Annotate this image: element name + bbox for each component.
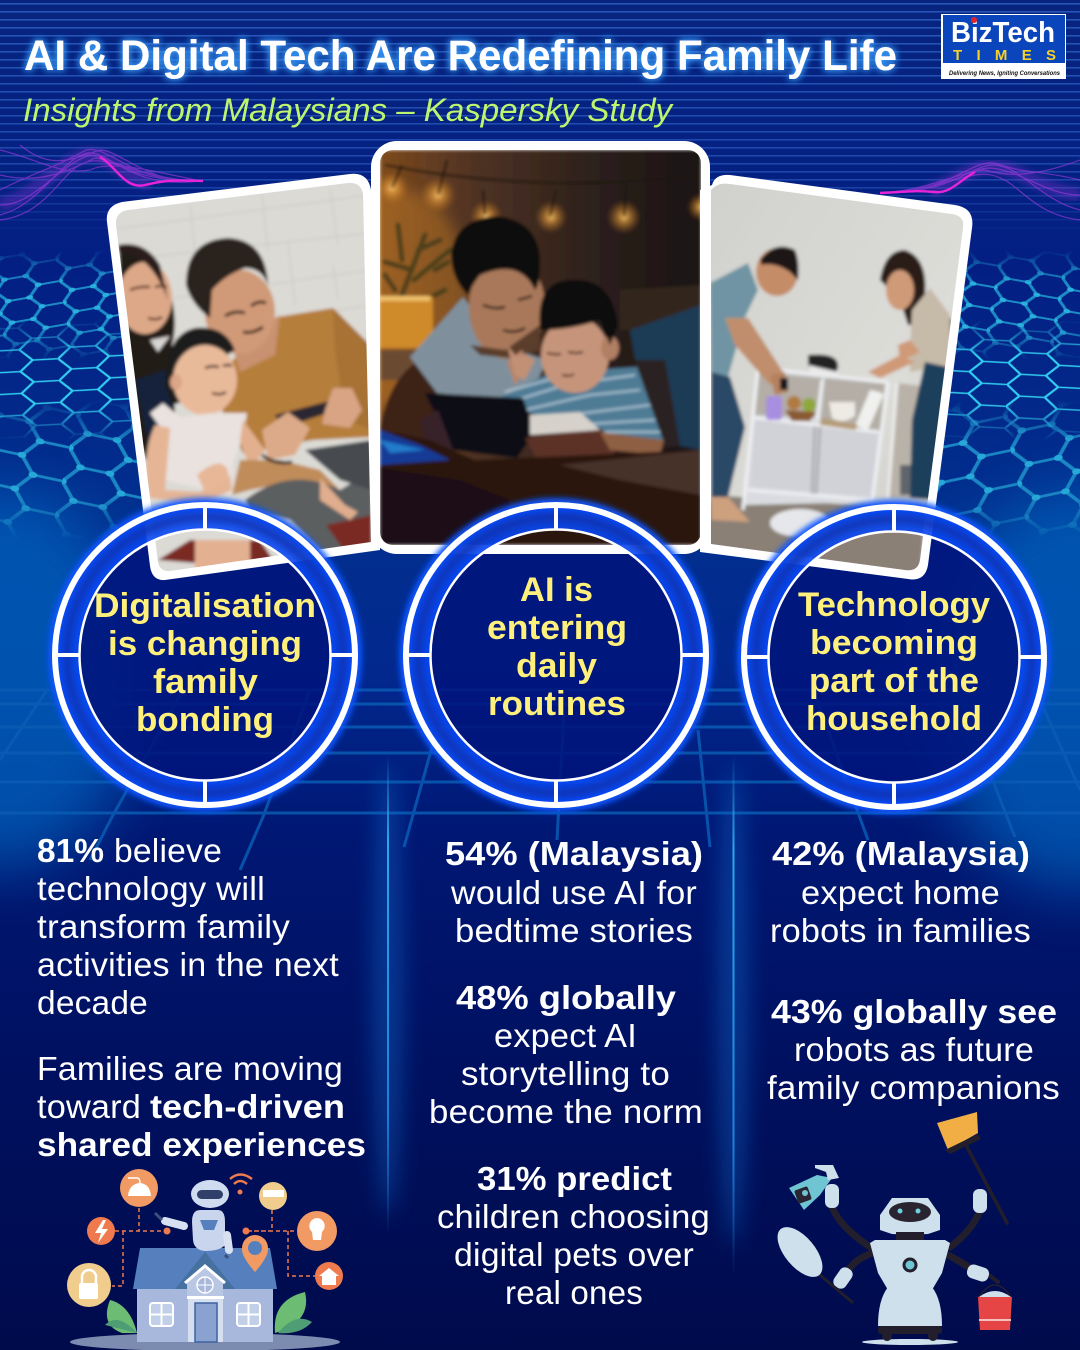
decorative wave left [0, 145, 203, 220]
heading: digitalisation: Digitalisation [94, 587, 316, 625]
text block: AI storytelling stat: expect AI [494, 1017, 637, 1054]
text block: column 1 stat: technology will [37, 870, 265, 907]
text block: digital pets stat: 31% predict [477, 1160, 672, 1197]
circle badge: household technology [744, 507, 1044, 807]
text block: robot companions stat: robots as future [794, 1031, 1034, 1068]
heading: digitalisation: family [153, 663, 258, 701]
text block: digital pets stat: children choosing [437, 1198, 710, 1235]
icon: smart home with robot [67, 1169, 343, 1350]
logo: BizTech Times [941, 14, 1066, 79]
text block: robot companions stat: 43% globally see [771, 993, 1057, 1030]
text block: digital pets stat: digital pets over [454, 1236, 694, 1273]
heading: digitalisation [94, 587, 316, 739]
icon: cleaning robot with tools [769, 1112, 1012, 1345]
photo: couple with home robot and cabinet [700, 170, 980, 590]
text block: bedtime stories stat: bedtime stories [455, 912, 693, 949]
text block: digital pets stat: real ones [505, 1274, 643, 1311]
text block: digital pets stat [437, 1160, 710, 1311]
text block: home robots stat: 42% (Malaysia) [772, 835, 1030, 872]
heading: AI routines: daily [516, 647, 597, 685]
logo: BizTech Times: Delivering News, Igniting Conversations [949, 70, 1061, 77]
text block: bedtime stories stat: 54% (Malaysia) [445, 835, 703, 872]
circle badge: digitalisation [55, 505, 355, 805]
text block: AI storytelling stat: 48% globally [456, 979, 677, 1016]
logo: BizTech Times: TIMES [953, 47, 1056, 64]
navy discs behind photos [78, 528, 1021, 784]
text block: robot companions stat [767, 993, 1060, 1106]
heading: digitalisation: bonding [136, 701, 274, 739]
subtitle: Insights from Malaysians – Kaspersky Study [23, 92, 674, 128]
text block: column 1 shared experiences: shared experiences [37, 1126, 366, 1163]
heading: AI routines [487, 571, 627, 723]
heading: household technology [798, 586, 990, 738]
circle badge: AI routines [406, 505, 706, 805]
text block: column 1 shared experiences [37, 1050, 366, 1163]
text block: bedtime stories stat [445, 835, 703, 949]
text block: column 1 stat: 81% [37, 832, 104, 869]
text block: home robots stat: robots in families [770, 912, 1031, 949]
text block: home robots stat: expect home [801, 874, 1000, 911]
logo: BizTech Times: BizTech [951, 17, 1055, 49]
heading: household technology: household [806, 700, 982, 738]
text block: column 1 stat: decade [37, 984, 148, 1021]
heading: household technology: becoming [810, 624, 978, 662]
text block: bedtime stories stat: would use AI for [450, 874, 697, 911]
heading: AI routines: entering [487, 609, 627, 647]
text block: column 1 shared experiences: Families are moving [37, 1050, 343, 1087]
photo: father and son with tablet at night [371, 141, 710, 554]
heading: AI routines: routines [488, 685, 626, 723]
text block: home robots stat [770, 835, 1031, 949]
text block: column 1 shared experiences: toward [37, 1088, 141, 1125]
heading: AI routines: AI is [520, 571, 593, 609]
text block: column 1 stat: believe [114, 832, 222, 869]
heading: household technology: part of the [809, 662, 979, 700]
title: AI & Digital Tech Are Redefining Family Life [24, 32, 897, 80]
text block: AI storytelling stat [429, 979, 703, 1130]
decorative wave right [880, 160, 1080, 220]
heading: household technology: Technology [798, 586, 990, 624]
text block: column 1 stat: transform family [37, 908, 290, 945]
text block: robot companions stat: family companions [767, 1069, 1060, 1106]
heading: digitalisation: is changing [108, 625, 302, 663]
text block: column 1 stat: activities in the next [37, 946, 339, 983]
text block: column 1 shared experiences: tech-driven [150, 1088, 345, 1125]
photo: family with smartphone [100, 170, 390, 590]
text block: column 1 stat [37, 832, 339, 1021]
text block: AI storytelling stat: become the norm [429, 1093, 703, 1130]
text block: AI storytelling stat: storytelling to [461, 1055, 670, 1092]
